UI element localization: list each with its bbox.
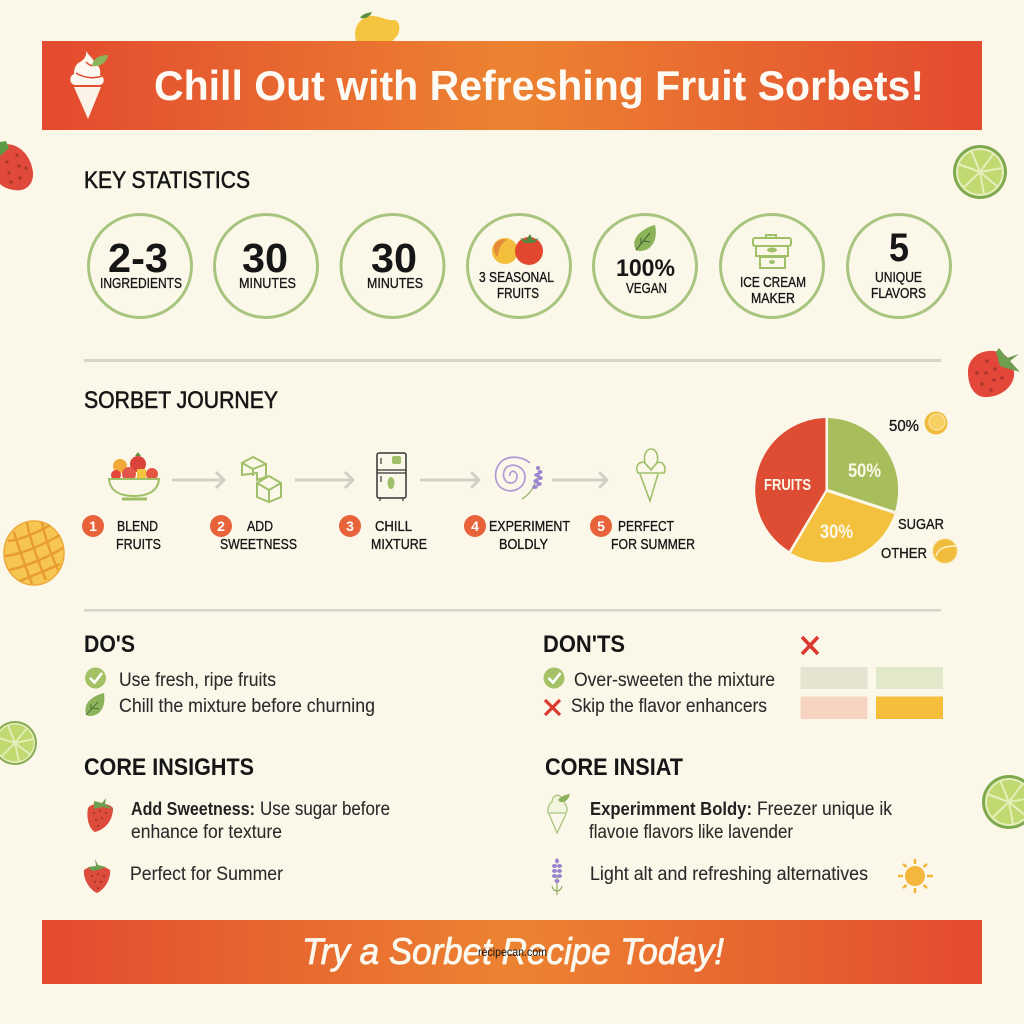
text: experiment boldly: flavoıe flavors like lavender [589, 822, 794, 843]
stat: 30 minutes second [341, 214, 444, 318]
icon: lavender [552, 858, 562, 895]
stat: 100% vegan: 100% [616, 255, 675, 282]
stat: 30 minutes [214, 214, 318, 318]
icon: fruit bowl [109, 452, 159, 499]
stat: 5 unique flavors: FLAVORS [871, 286, 926, 302]
stat: 30 minutes second: 30 [371, 235, 417, 281]
step 2: 2 [217, 518, 225, 534]
text: skip enhancers: Skip the flavor enhancers [571, 696, 767, 717]
stat: ice cream maker: MAKER [751, 291, 795, 307]
icon: swirl and lavender [496, 457, 543, 499]
stat: 5 unique flavors [848, 214, 950, 318]
step 1: FRUITS [116, 536, 161, 553]
arrow 4 [552, 472, 607, 488]
pie chart: FRUITS [764, 477, 811, 494]
pie chart: 30% [820, 522, 853, 543]
heading: don'ts: DON'TS [543, 631, 625, 658]
text: add sweetness: enhance for texture [131, 822, 282, 843]
text: experiment boldly: Freezer unique ik [757, 799, 892, 820]
heading: core insights: CORE INSIGHTS [84, 754, 254, 781]
decoration: lime left [0, 721, 37, 765]
decoration: lime right top [953, 145, 1007, 199]
pie label: other [881, 539, 957, 563]
watermark: recipecan.com [478, 945, 547, 959]
icon: strawberry [84, 859, 110, 893]
decoration: mango top [355, 12, 399, 41]
step 3: CHILL [375, 518, 412, 535]
step 3: 3 [346, 518, 354, 534]
title: Chill Out with Refreshing Fruit Sorbets! [154, 62, 924, 109]
text: add sweetness: Add Sweetness: [131, 799, 255, 819]
icon: check [85, 668, 106, 688]
text: chill mixture: Chill the mixture before churning [119, 696, 375, 717]
step 5: PERFECT [618, 518, 674, 535]
icon: fridge [377, 453, 406, 501]
pie chart: 50% [848, 461, 881, 482]
stat: 30 minutes second: MINUTES [367, 275, 423, 292]
stat: 2-3 ingredients [88, 214, 192, 318]
pie label: 50%: 50% [889, 418, 919, 435]
step 3 [339, 515, 427, 553]
icon: red cross [802, 637, 818, 654]
icon: ice cream cone [70, 50, 108, 119]
heading: core insiat: CORE INSIAT [545, 754, 683, 781]
arrow 1 [172, 472, 224, 488]
heading: sorbet journey: SORBET JOURNEY [84, 387, 278, 414]
stat: 2-3 ingredients: 2-3 [108, 235, 168, 281]
text: experiment boldly: Experimment Boldy: [590, 799, 752, 819]
stat: 5 unique flavors: 5 [889, 226, 909, 270]
stat: ice cream maker: ICE CREAM [740, 275, 806, 291]
panel: do's [84, 631, 375, 717]
step 5: FOR SUMMER [611, 536, 695, 553]
step 1: BLEND [117, 518, 158, 535]
text: experiment boldly [589, 799, 892, 843]
icon: check [544, 668, 564, 688]
arrow 3 [420, 472, 479, 488]
text: add sweetness [131, 799, 390, 843]
swatches [800, 667, 943, 719]
stat: 100% vegan: VEGAN [626, 280, 667, 297]
stat: 2-3 ingredients: INGREDIENTS [100, 275, 182, 292]
text: over-sweeten: Over-sweeten the mixture [574, 670, 775, 691]
icon: red cross small [545, 700, 560, 715]
decoration: lime right bottom [982, 775, 1024, 829]
step 2 [210, 515, 297, 553]
pie chart [755, 418, 898, 562]
icon: leaf [85, 693, 104, 716]
stat: 30 minutes: 30 [242, 235, 288, 281]
text: light alternatives: Light alt and refreshing alternatives [590, 864, 868, 885]
stat: 5 unique flavors: UNIQUE [875, 270, 922, 286]
step 4: BOLDLY [499, 536, 548, 553]
icon: ice cream outline [548, 794, 570, 833]
step 1 [82, 515, 161, 553]
pie label: 50% [889, 412, 948, 435]
stat: 3 seasonal fruits [468, 214, 570, 318]
decoration: strawberry right [968, 348, 1020, 397]
text: perfect for summer: Perfect for Summer [130, 864, 284, 885]
heading: do's: DO'S [84, 631, 135, 658]
footer banner [42, 920, 982, 984]
step 1: 1 [89, 518, 97, 534]
icon: strawberry [87, 798, 113, 832]
stat: 3 seasonal fruits: FRUITS [497, 286, 539, 302]
step 2: SWEETNESS [220, 536, 297, 553]
decoration: strawberry left [0, 141, 33, 190]
step 3: MIXTURE [371, 536, 427, 553]
stat: 3 seasonal fruits: 3 SEASONAL [479, 270, 554, 286]
panel: core insights left [84, 754, 390, 893]
heading: key statistics: KEY STATISTICS [84, 167, 250, 194]
panel: don'ts [543, 631, 943, 719]
step 5: 5 [597, 518, 605, 534]
icon: ice cream cone [637, 449, 665, 501]
pie label: sugar: SUGAR [898, 516, 944, 533]
icon: ice cubes [242, 457, 281, 502]
step 4: 4 [471, 518, 479, 534]
header banner [42, 41, 982, 130]
step 4 [464, 515, 570, 553]
icon: sun [898, 859, 933, 893]
panel: core insights right [545, 754, 933, 895]
stat: 100% vegan [594, 214, 696, 318]
text: add sweetness: Use sugar before [260, 799, 390, 820]
step 5 [590, 515, 695, 553]
decoration: mango left [4, 521, 64, 585]
pie label: other: OTHER [881, 545, 927, 562]
step 4: EXPERIMENT [489, 518, 570, 535]
stat: 30 minutes: MINUTES [239, 275, 296, 292]
arrow 2 [295, 472, 353, 488]
call to action: Try a Sorbet Recipe Today! [302, 931, 724, 972]
text: fresh fruits: Use fresh, ripe fruits [119, 670, 276, 691]
step 2: ADD [247, 518, 273, 535]
stat: ice cream maker [720, 214, 824, 318]
